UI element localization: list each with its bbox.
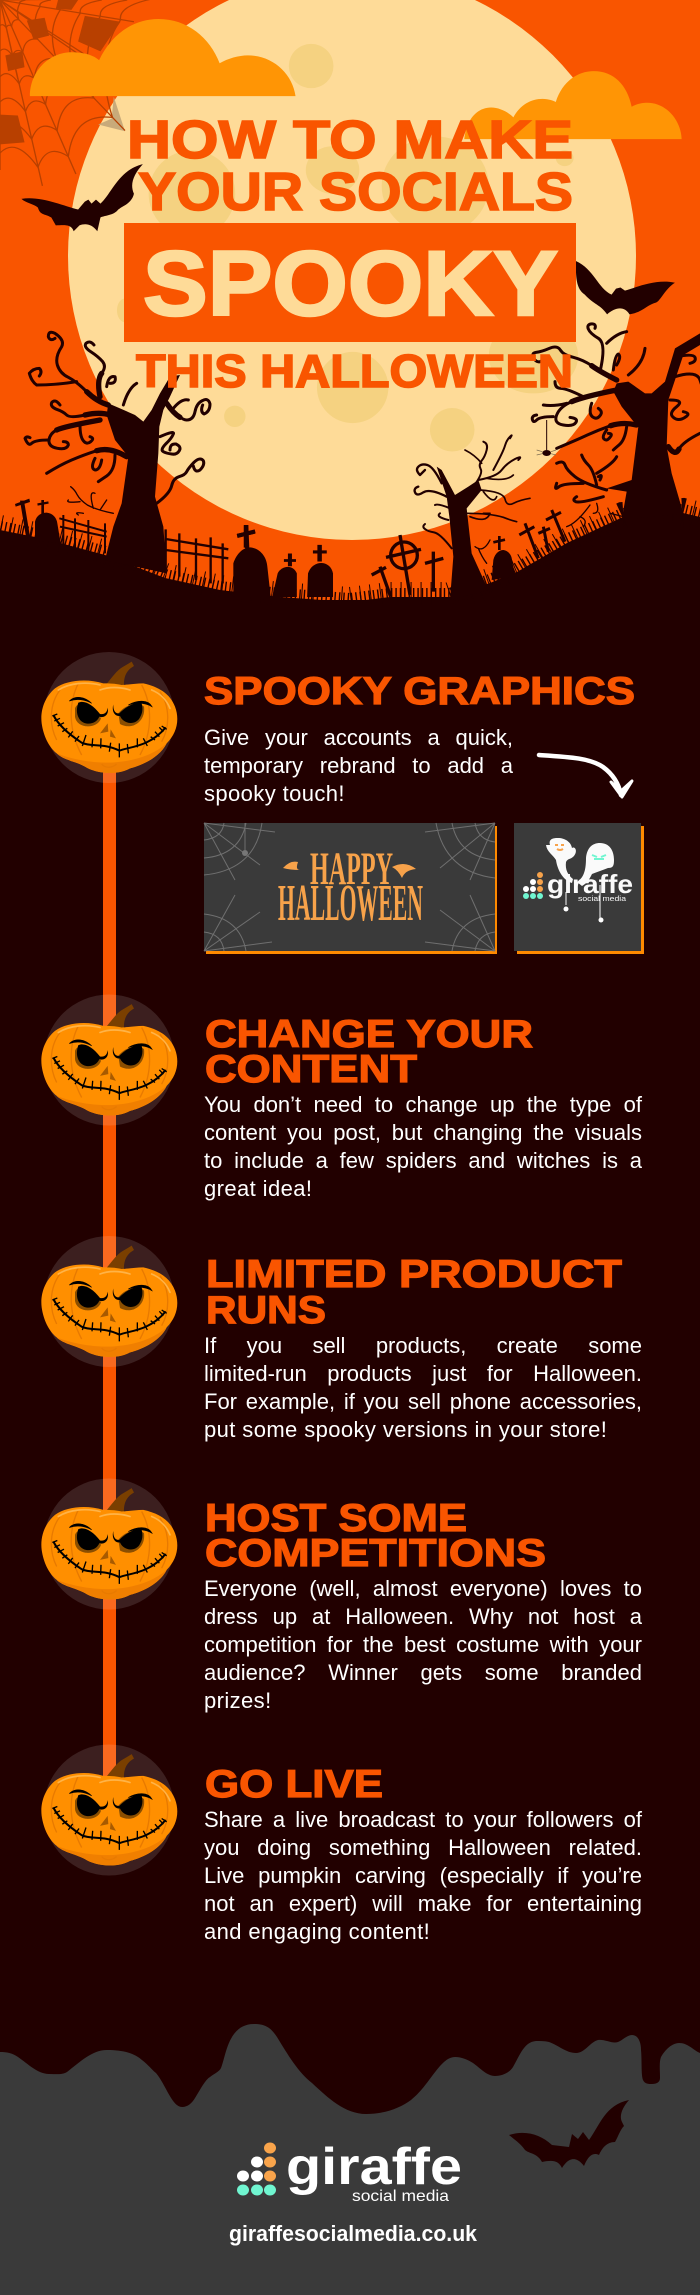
text: host some competitions: Everyone (well, almost everyone) loves to (204, 1576, 642, 1601)
timeline marker 4: pumpkin (41, 1478, 177, 1610)
heading: change your content: CHANGE YOUR (205, 1013, 533, 1056)
text: change your content (204, 1092, 642, 1201)
footer website url: giraffesocialmedia.co.uk (229, 2221, 478, 2246)
header: orange sky (0, 0, 700, 600)
text: change your content: to include a few spiders and witches is a (204, 1148, 642, 1173)
centre graveyard stones (234, 525, 333, 597)
heading: spooky graphics: SPOOKY GRAPHICS (204, 670, 635, 713)
text: limited product runs: For example, if you sell phone accessories, (204, 1389, 642, 1414)
cloud left (30, 19, 296, 96)
title: your socials: YOUR SOCIALS (138, 162, 573, 222)
timeline line (103, 717, 116, 1807)
bat right (576, 261, 675, 314)
title: how to make: HOW TO MAKE (127, 110, 573, 170)
body background (0, 605, 700, 2105)
text: limited product runs (204, 1333, 642, 1442)
text: spooky graphics: temporary rebrand to add a (204, 753, 513, 778)
text: change your content: content you post, but changing the visuals (204, 1120, 642, 1145)
heading: limited product runs: RUNS (206, 1289, 326, 1332)
footer logo: giraffe social media: giraffe (286, 2138, 462, 2196)
heading: limited product runs: LIMITED PRODUCT (206, 1253, 622, 1296)
text: go live: and engaging content! (204, 1919, 430, 1944)
text: host some competitions: competition for the best costume with your (204, 1632, 642, 1657)
graphic: happy halloween banner: HAPPY (310, 843, 393, 895)
text: go live: you doing something Halloween related. (204, 1835, 642, 1860)
text: spooky graphics (204, 725, 513, 806)
timeline marker 5: pumpkin (41, 1744, 177, 1876)
text: spooky graphics: Give your accounts a quick, (204, 725, 513, 750)
graphic: spooky logo profile picture: giraffe (547, 869, 633, 899)
arrow pointing to graphics (539, 755, 632, 797)
heading: go live: GO LIVE (205, 1763, 383, 1806)
footer logo: giraffe social media: social media (352, 2188, 449, 2205)
text: limited product runs: put some spooky versions in your store! (204, 1417, 607, 1442)
ground silhouette with grass (0, 513, 700, 640)
text: go live: Live pumpkin carving (especially if you’re (204, 1863, 642, 1888)
heading: limited product runs (206, 1253, 622, 1332)
timeline marker 2: pumpkin (41, 994, 177, 1126)
title banner: spooky: SPOOKY (143, 233, 558, 335)
graphic: spooky logo profile picture: social media (578, 894, 627, 903)
text: limited product runs: limited-run products just for Halloween. (204, 1361, 642, 1386)
heading: change your content: CONTENT (205, 1048, 417, 1091)
title: this halloween: THIS HALLOWEEN (136, 345, 573, 397)
footer: dripping grey panel (0, 2024, 700, 2295)
text: host some competitions: audience? Winner gets some branded (204, 1660, 642, 1685)
timeline marker 1: pumpkin (41, 652, 177, 783)
text: host some competitions: dress up at Halloween. Why not host a (204, 1604, 642, 1629)
heading: host some competitions: COMPETITIONS (205, 1532, 546, 1575)
moon (68, 0, 636, 540)
text: host some competitions: prizes! (204, 1688, 272, 1713)
text: change your content: great idea! (204, 1176, 312, 1201)
text: change your content: You don’t need to change up the type of (204, 1092, 642, 1117)
text: limited product runs: If you sell products, create some (204, 1333, 642, 1358)
text: go live: not an expert) will make for entertaining (204, 1891, 642, 1916)
footer bat (509, 2100, 629, 2168)
text: go live (204, 1807, 642, 1944)
heading: host some competitions (205, 1497, 546, 1575)
heading: change your content (205, 1013, 533, 1091)
text: host some competitions (204, 1576, 642, 1713)
cloud right (464, 71, 682, 139)
heading: host some competitions: HOST SOME (205, 1497, 467, 1540)
bat left (21, 164, 143, 231)
footer logo: giraffe social media (237, 2138, 462, 2205)
graphic: happy halloween banner (204, 823, 497, 954)
spider hanging from branch (537, 420, 556, 456)
small right tree and crosses (372, 435, 565, 600)
right big tree (532, 324, 700, 527)
text: spooky graphics: spooky touch! (204, 781, 345, 806)
text: go live: Share a live broadcast to your followers of (204, 1807, 642, 1832)
timeline marker 3: pumpkin (41, 1236, 177, 1367)
graphic: spooky logo profile picture (514, 823, 644, 954)
left tree and graveyard (15, 332, 271, 597)
spider web, top left corner (0, 0, 170, 186)
graphic: happy halloween banner: HALLOWEEN (278, 875, 423, 932)
